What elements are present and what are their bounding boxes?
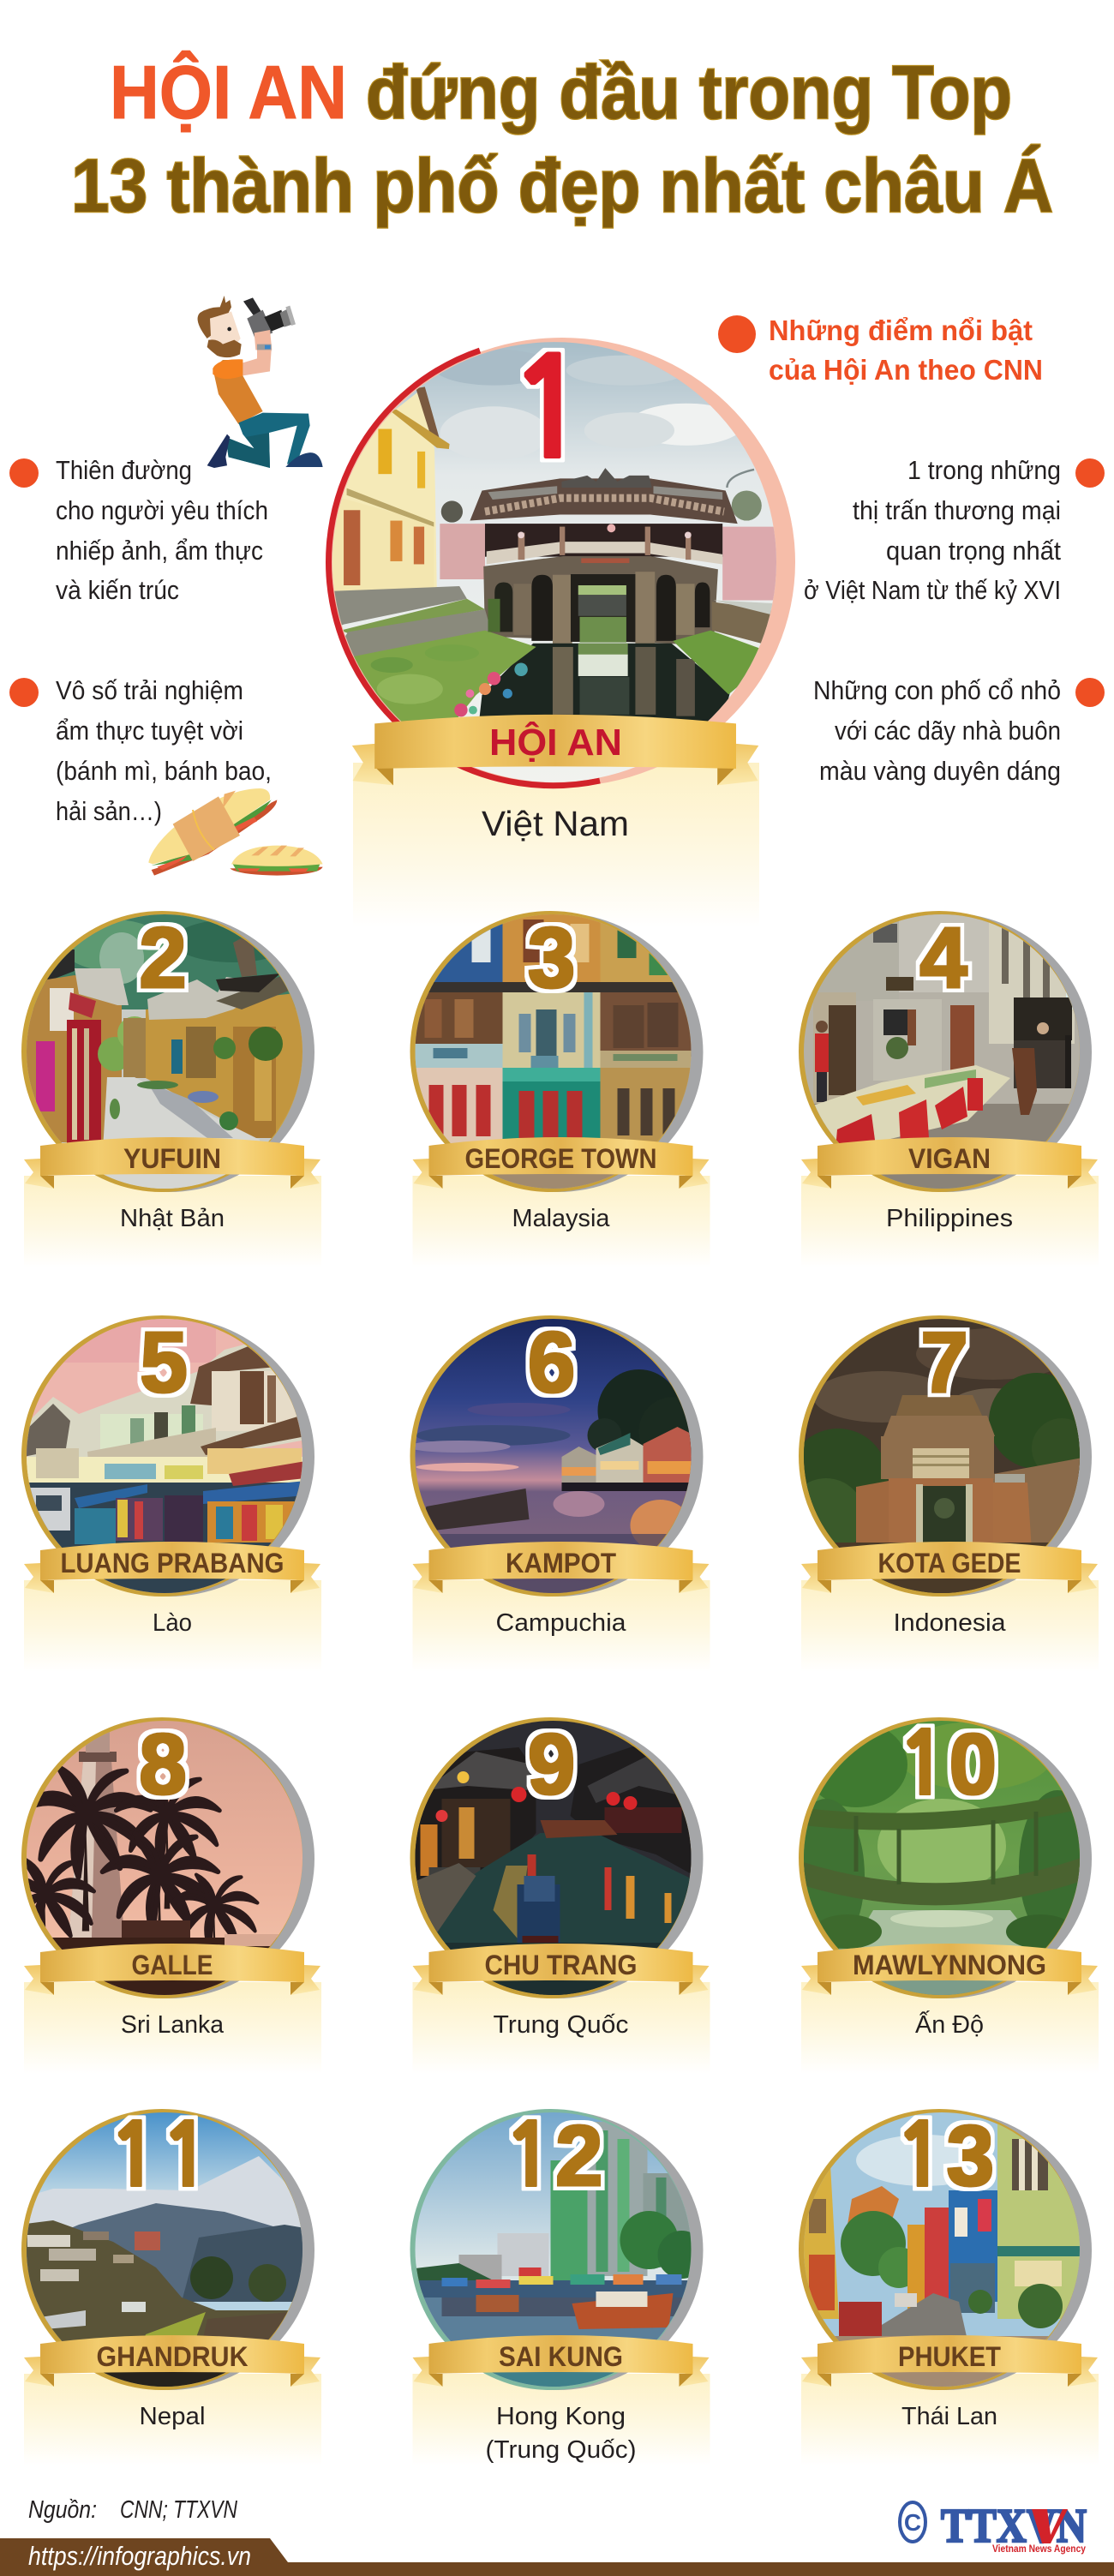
- city: MAWLYNNONG: [853, 1950, 1046, 1980]
- photo: Sai Kung: [415, 2112, 691, 2387]
- number: 12: [503, 2108, 603, 2204]
- text lines: Thiên đường: [56, 455, 192, 485]
- photo: Ghandruk: [27, 2112, 302, 2387]
- title: [71, 50, 1053, 228]
- city: GALLE: [132, 1950, 213, 1980]
- ribbon: [24, 1137, 320, 1189]
- photo: Chu Trang: [415, 1721, 691, 1995]
- photo: Mawlynnong: [804, 1721, 1080, 1995]
- ribbon: [413, 1944, 710, 1995]
- text block: food: [9, 675, 272, 826]
- text lines: (bánh mì, bánh bao,: [56, 756, 272, 786]
- tagline: Vietnam News Agency: [992, 2543, 1086, 2555]
- city: LUANG PRABANG: [60, 1548, 284, 1579]
- country: Sri Lanka: [121, 2011, 225, 2039]
- number: 5: [140, 1315, 188, 1411]
- country: Campuchia: [495, 1609, 626, 1637]
- swoosh: [1032, 2509, 1068, 2543]
- heading text: [769, 315, 1043, 386]
- city: KAMPOT: [506, 1548, 616, 1579]
- ribbon: [24, 1542, 320, 1593]
- country: (Trung Quốc): [486, 2436, 636, 2464]
- text lines: [804, 455, 1061, 605]
- text lines: với các dãy nhà buôn: [835, 716, 1061, 746]
- tile: 12 Sai Kung: [408, 2105, 710, 2465]
- city: PHUKET: [898, 2341, 1001, 2372]
- country: Indonesia: [893, 1609, 1006, 1637]
- source: CNN; TTXVN: [120, 2496, 237, 2524]
- city: GHANDRUK: [96, 2341, 249, 2372]
- country: [485, 2403, 636, 2464]
- country: Nhật Bản: [120, 1205, 225, 1232]
- number: 6: [528, 1315, 575, 1411]
- title line 1: HỘI AN: [110, 50, 347, 135]
- country: Thái Lan: [901, 2403, 997, 2430]
- number: 2: [139, 910, 187, 1006]
- tile: 8 Galle: [21, 1717, 321, 2062]
- ribbon: [413, 1542, 710, 1593]
- country: Ấn Độ: [915, 2010, 984, 2039]
- number: 13: [895, 2108, 994, 2204]
- text lines: Vô số trải nghiệm: [56, 675, 243, 705]
- tile: 9 Chu Trang: [408, 1713, 710, 2074]
- text lines: ở Việt Nam từ thế kỷ XVI: [804, 575, 1061, 605]
- tile: 7 Kota Gede: [788, 1311, 1099, 1672]
- tile: 10 Mawlynnong: [788, 1713, 1099, 2074]
- text lines: màu vàng duyên dáng: [819, 756, 1061, 786]
- title line 1: đứng đầu trong Top: [366, 50, 1012, 135]
- city: SAI KUNG: [499, 2341, 623, 2372]
- callout: heading bullets: [718, 315, 1043, 386]
- source: [28, 2496, 237, 2524]
- bullet: [9, 678, 39, 707]
- cream panel: [353, 763, 759, 927]
- text lines: 1 trong những: [907, 455, 1061, 485]
- tile: 2 Yufuin: [19, 907, 321, 1267]
- country: Hong Kong: [496, 2403, 626, 2430]
- tile: 5 Luang Prabang: [19, 1311, 321, 1672]
- country: Philippines: [886, 1205, 1013, 1232]
- tile: 11 Ghandruk: [19, 2105, 321, 2465]
- number: 4: [919, 910, 967, 1006]
- text lines: quan trọng nhất: [886, 536, 1061, 566]
- number 1: 1: [508, 341, 590, 477]
- logo: TTXVN: [900, 2500, 1087, 2555]
- photo: George Town: [415, 914, 691, 1189]
- city: YUFUIN: [123, 1143, 221, 1174]
- city: KOTA GEDE: [877, 1548, 1021, 1579]
- number: 10: [897, 1716, 997, 1812]
- ribbon: [801, 2335, 1098, 2387]
- ribbon: [801, 1542, 1098, 1593]
- text block: old streets: [813, 675, 1105, 786]
- text lines: [813, 675, 1061, 786]
- footer bar: [0, 2538, 1114, 2576]
- photo: Vigan: [804, 914, 1080, 1189]
- text lines: nhiếp ảnh, ẩm thực: [56, 536, 263, 566]
- ribbon: [413, 1137, 710, 1189]
- photo: Japanese covered bridge: [332, 342, 776, 782]
- heading text: Những điểm nổi bật: [769, 315, 1033, 346]
- number: 7: [920, 1315, 968, 1411]
- title line 1: [110, 50, 1012, 135]
- tile: 6 Kampot: [408, 1311, 710, 1672]
- copyright mark: [900, 2502, 925, 2542]
- city: CHU TRANG: [485, 1950, 638, 1980]
- ribbon: [801, 1944, 1098, 1995]
- country: Trung Quốc: [494, 2011, 629, 2039]
- bullet: [718, 315, 756, 353]
- number: 11: [108, 2113, 213, 2198]
- photo: Kampot: [415, 1319, 691, 1593]
- number: 9: [528, 1716, 575, 1812]
- photo: Kota Gede: [804, 1319, 1080, 1593]
- photo: Luang Prabang: [27, 1319, 302, 1593]
- source: Nguồn:: [28, 2496, 97, 2524]
- country: Nepal: [139, 2403, 206, 2430]
- circle rim: [329, 338, 795, 787]
- ribbon: [352, 715, 758, 785]
- heading text: của Hội An theo CNN: [769, 354, 1043, 386]
- panel: Hoi An feature: [326, 334, 797, 927]
- text lines: và kiến trúc: [56, 575, 179, 605]
- tile: 13 Phuket: [796, 2105, 1099, 2465]
- tile: 3 George Town: [408, 907, 710, 1267]
- number: 8: [139, 1716, 187, 1812]
- photo: Galle: [27, 1721, 302, 1995]
- text lines: [56, 675, 272, 826]
- icon: photographer: [198, 296, 323, 468]
- wordmark: TTXVN: [941, 2500, 1087, 2553]
- text lines: [56, 455, 268, 605]
- text lines: Những con phố cổ nhỏ: [813, 675, 1061, 705]
- footer url: https://infographics.vn: [28, 2541, 251, 2571]
- text block: trade town: [804, 455, 1105, 605]
- city: GEORGE TOWN: [464, 1143, 656, 1174]
- country: Malaysia: [512, 1205, 610, 1232]
- text lines: ẩm thực tuyệt vời: [56, 716, 243, 746]
- ribbon: [413, 2335, 710, 2387]
- photo: Yufuin: [27, 914, 302, 1189]
- bullet: [9, 458, 39, 488]
- tile: 4 Vigan: [794, 907, 1099, 1267]
- bullet: [1075, 458, 1105, 488]
- text lines: hải sản…): [56, 796, 162, 826]
- bullet: [1075, 678, 1105, 707]
- city: VIGAN: [908, 1143, 991, 1174]
- city name: HỘI AN: [489, 720, 622, 764]
- text block: photography: [9, 455, 268, 605]
- photo: Phuket: [804, 2112, 1080, 2387]
- ribbon: [24, 1944, 320, 1995]
- ribbon: [24, 2335, 320, 2387]
- icon: banh mi: [148, 788, 323, 876]
- country: Lào: [153, 1609, 192, 1637]
- text lines: cho người yêu thích: [56, 495, 268, 525]
- text lines: thị trấn thương mại: [853, 495, 1061, 525]
- ribbon: [801, 1137, 1098, 1189]
- number: 3: [528, 910, 575, 1006]
- country: Việt Nam: [482, 804, 629, 843]
- copyright mark: C: [904, 2509, 921, 2536]
